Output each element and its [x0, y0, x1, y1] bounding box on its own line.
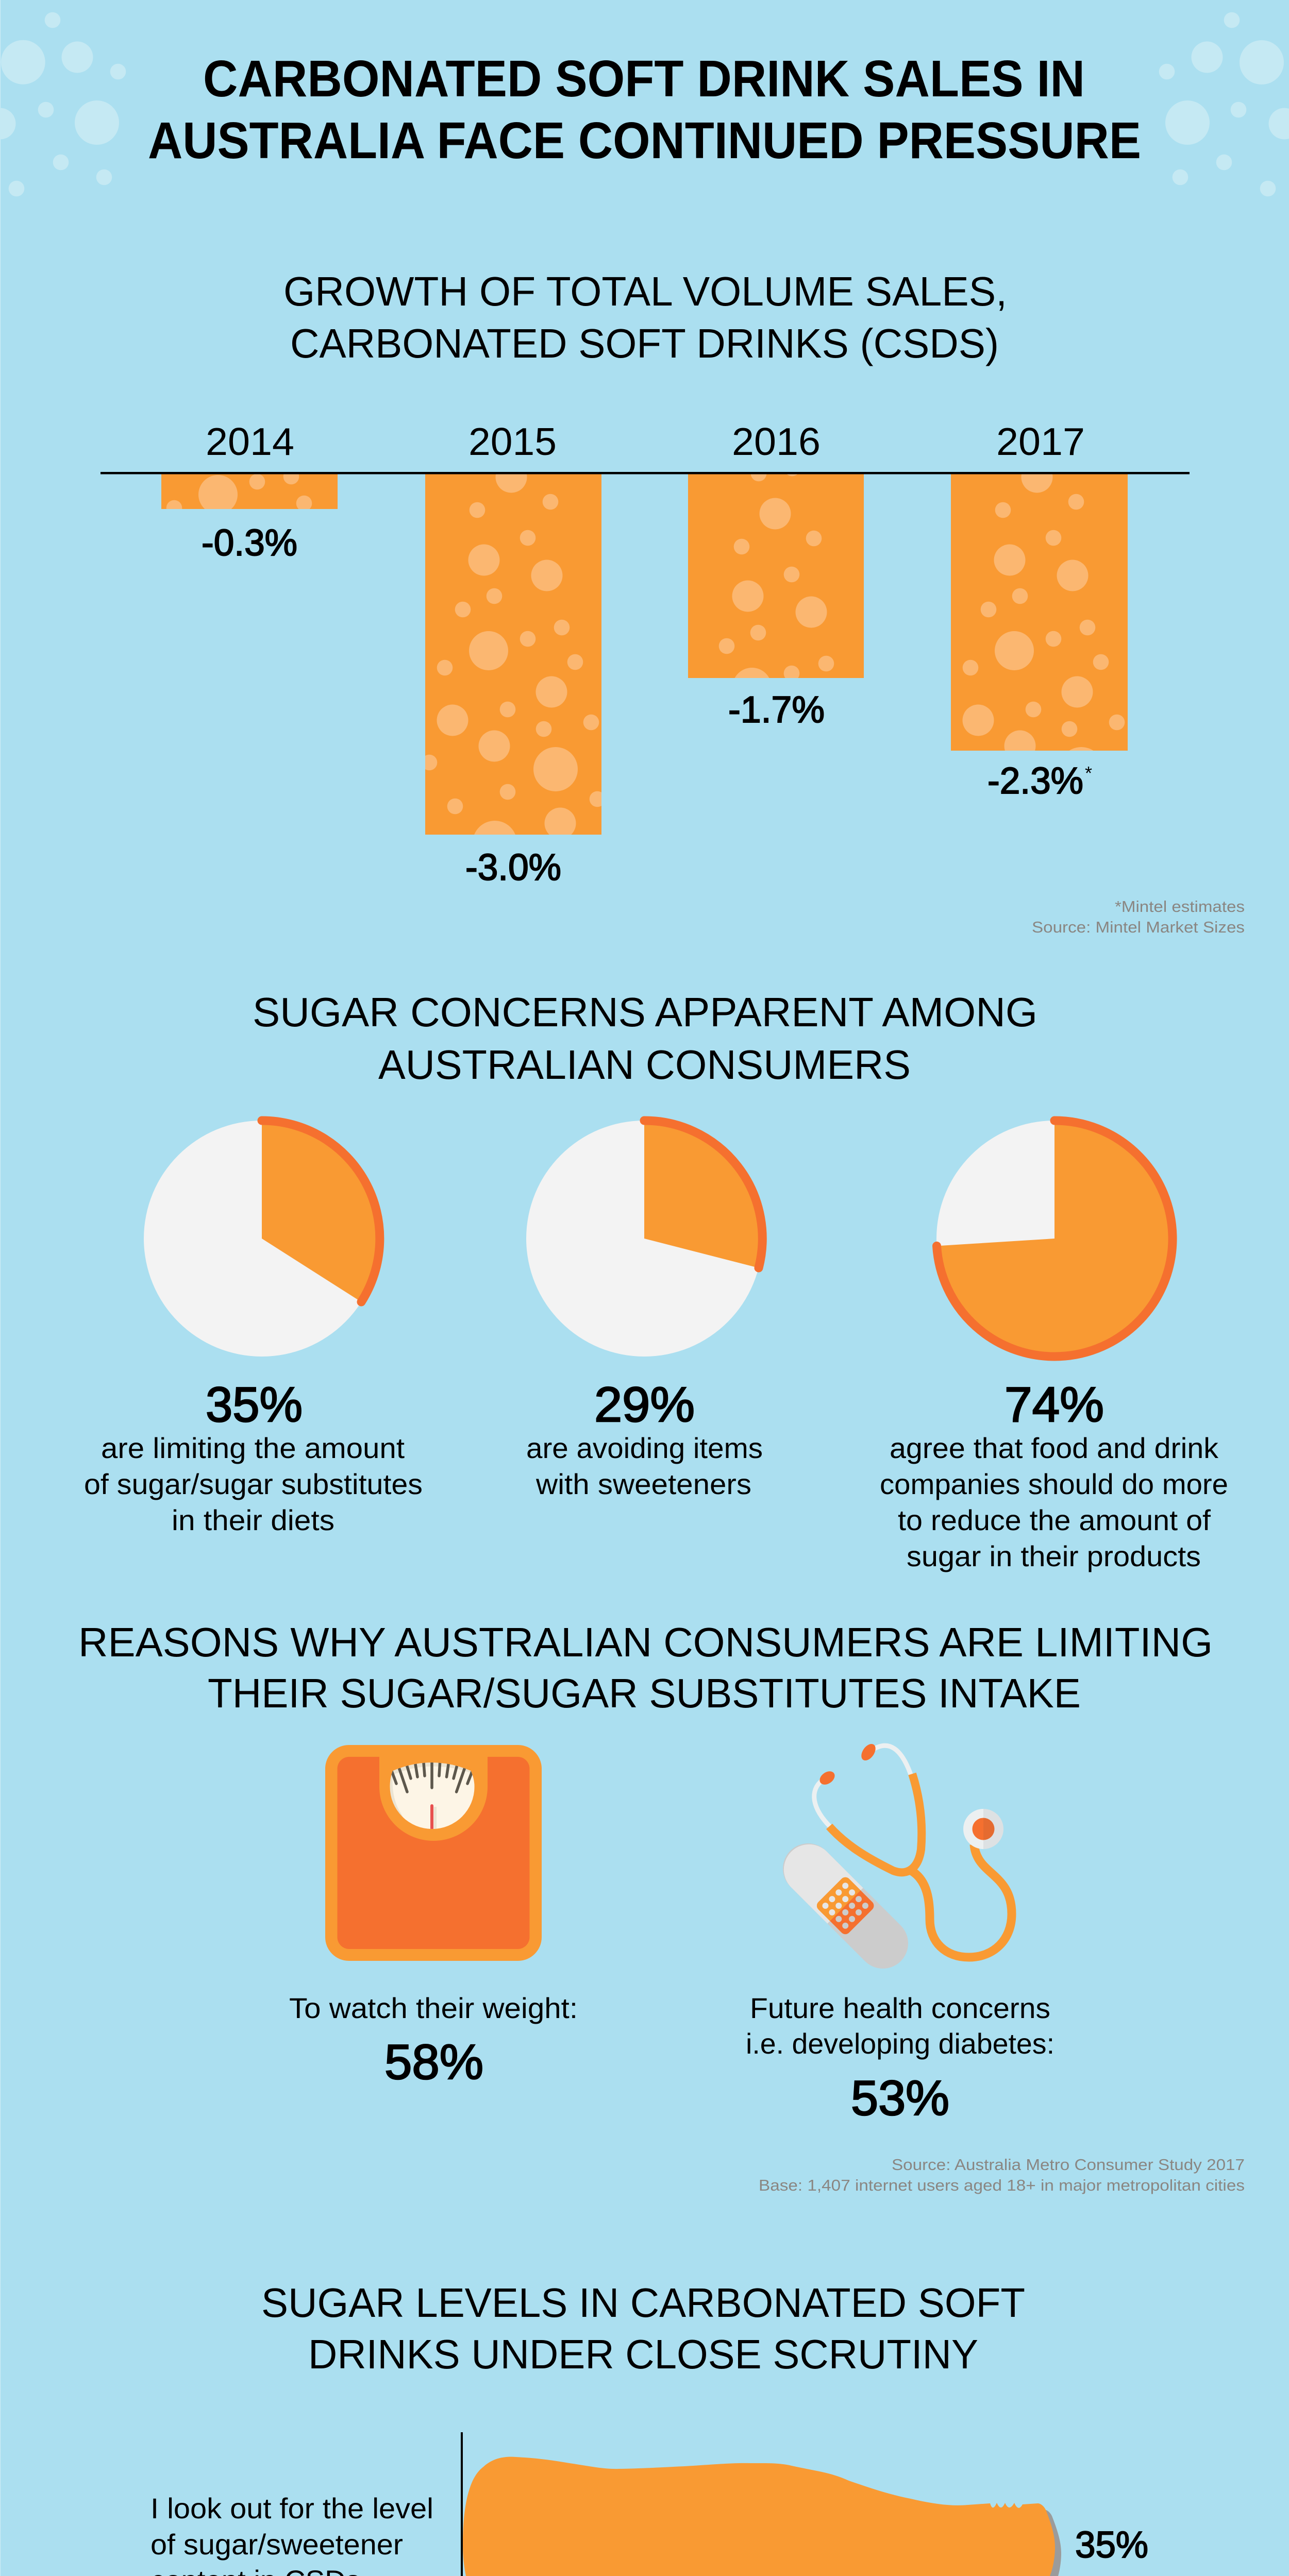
panel: growth of total volume sales [101, 268, 1245, 936]
stat: 74%: companies should do more [880, 1468, 1228, 1500]
year labels: 2016 [732, 420, 821, 463]
label: level of sugar: I look out for the level [150, 2492, 433, 2524]
panel: reasons for limiting sugar [78, 1619, 1245, 2194]
stat: future health 53%: 53% [851, 2071, 949, 2126]
stat: 29%: with sweeteners [535, 1468, 751, 1500]
bar values: -3.0% [465, 847, 561, 888]
source note: Source: Australia Metro Consumer Study 2017 [892, 2156, 1245, 2174]
icon: stethoscope and bandage [784, 1741, 1012, 1957]
stat: 74%: agree that food and drink [890, 1432, 1219, 1464]
heading: SUGAR LEVELS IN CARBONATED SOFT [261, 2280, 1025, 2326]
stat: weight 58%: 58% [384, 2035, 483, 2090]
pie chart: 74% [936, 1121, 1173, 1357]
stat: 29%: 29% [594, 1377, 695, 1432]
bar 2014 [161, 474, 338, 509]
title: CARBONATED SOFT DRINK SALES IN [203, 50, 1085, 108]
stat: 29%: are avoiding items [526, 1432, 763, 1464]
label: level of sugar: of sugar/sweetener [150, 2528, 403, 2561]
year labels: 2017 [996, 420, 1085, 463]
source note: Source: Mintel Market Sizes [1032, 918, 1245, 936]
stat: weight 58%: To watch their weight: [289, 1992, 578, 2024]
stat: 35%: of sugar/sugar substitutes [84, 1468, 423, 1500]
stat: 35%: in their diets [172, 1504, 334, 1536]
heading: AUSTRALIAN CONSUMERS [378, 1042, 911, 1088]
stat: 29% [526, 1377, 763, 1500]
panel: sugar concerns [84, 989, 1228, 1572]
stat: 74% [880, 1377, 1228, 1572]
heading: CARBONATED SOFT DRINKS (CSDS) [290, 320, 999, 366]
label: level of sugar [150, 2492, 433, 2576]
bar values: -1.7% [728, 689, 825, 731]
heading [283, 268, 1007, 366]
stat: future health 53%: Future health concerns [750, 1992, 1050, 2024]
heading: DRINKS UNDER CLOSE SCRUTINY [308, 2331, 978, 2377]
bar values: -0.3% [202, 522, 297, 564]
stat: weight 58% [289, 1992, 578, 2090]
bar values: -2.3% [987, 760, 1083, 802]
decoration: bubbles top right [1159, 12, 1289, 196]
bar 2016 [688, 474, 864, 678]
axis line [101, 472, 1190, 474]
icon: bathroom scale [325, 1745, 542, 1961]
decoration: bubbles top left [0, 12, 126, 196]
heading: THEIR SUGAR/SUGAR SUBSTITUTES INTAKE [208, 1670, 1081, 1716]
pie chart: 29% [526, 1121, 762, 1357]
bar values [202, 522, 1092, 888]
value: 35%: 35% [1075, 2524, 1148, 2566]
source note: *Mintel estimates [1115, 897, 1245, 916]
stat: 35% [84, 1377, 423, 1536]
pie chart: 35% [144, 1121, 380, 1357]
stat: 74%: sugar in their products [907, 1540, 1201, 1572]
panel: sugar levels under scrutiny [150, 2280, 1241, 2576]
source note: Base: 1,407 internet users aged 18+ in major metropolitan cities [759, 2176, 1245, 2194]
title: AUSTRALIA FACE CONTINUED PRESSURE [148, 112, 1141, 170]
title [148, 50, 1141, 170]
heading [253, 989, 1037, 1088]
source note [759, 2156, 1245, 2194]
heading: SUGAR CONCERNS APPARENT AMONG [253, 989, 1037, 1035]
stat: 35%: 35% [206, 1377, 303, 1432]
year labels [206, 420, 1085, 463]
stat: 35%: are limiting the amount [101, 1432, 405, 1464]
bar 2017 [951, 474, 1128, 751]
heading: REASONS WHY AUSTRALIAN CONSUMERS ARE LIMITING [78, 1619, 1213, 1665]
stat: future health 53%: i.e. developing diabetes: [746, 2027, 1054, 2060]
bar 2015 [425, 474, 601, 835]
bar values: * [1085, 762, 1092, 784]
stat: 74%: to reduce the amount of [898, 1504, 1211, 1536]
source note [1032, 897, 1245, 936]
year labels: 2015 [468, 420, 557, 463]
bottle bar: 35% [463, 2457, 1061, 2576]
heading: GROWTH OF TOTAL VOLUME SALES, [283, 268, 1007, 314]
year labels: 2014 [206, 420, 294, 463]
stat: future health 53% [746, 1992, 1054, 2126]
heading [78, 1619, 1213, 1716]
axis line [461, 2432, 463, 2576]
stat: 74%: 74% [1005, 1377, 1104, 1432]
heading [261, 2280, 1025, 2377]
